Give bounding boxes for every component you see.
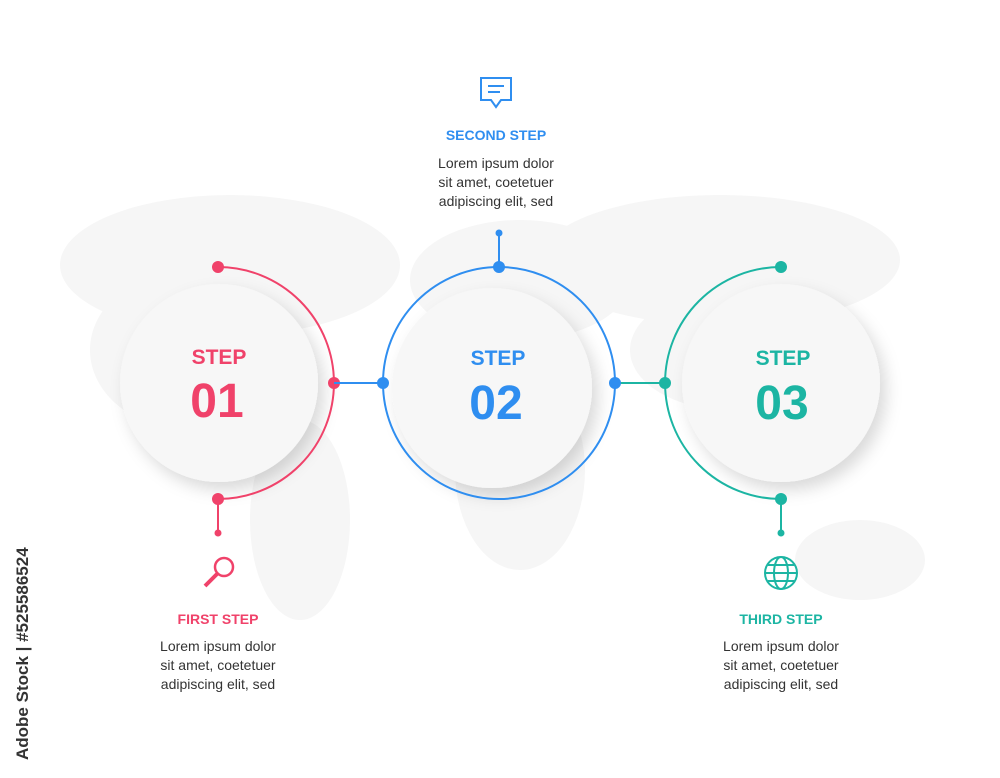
step 3 group: STEP xyxy=(756,347,810,370)
step 2 group xyxy=(377,230,621,499)
heading: second step: SECOND STEP xyxy=(446,127,546,143)
step 3 group xyxy=(659,261,880,536)
text: third step xyxy=(723,638,839,692)
text: third step: Lorem ipsum dolor xyxy=(723,638,839,654)
text: first step: sit amet, coetetuer xyxy=(160,657,276,673)
step 1 group: STEP xyxy=(192,346,246,369)
step 1 group xyxy=(120,261,340,536)
step 3 group: 03 xyxy=(755,377,809,430)
heading: first step: FIRST STEP xyxy=(178,611,258,627)
step 2 group: 02 xyxy=(469,377,523,430)
icon: magnifier xyxy=(205,558,233,586)
text: first step xyxy=(160,638,276,692)
step 1 group: 01 xyxy=(190,375,244,428)
text: first step: adipiscing elit, sed xyxy=(161,676,275,692)
icon: chat bubble xyxy=(481,78,511,107)
step 2 group: STEP xyxy=(471,347,525,370)
text: first step: Lorem ipsum dolor xyxy=(160,638,276,654)
text: second step: Lorem ipsum dolor xyxy=(438,155,554,171)
watermark: Adobe Stock | #525586524 xyxy=(13,547,32,760)
text: second step: adipiscing elit, sed xyxy=(439,193,553,209)
icon: globe xyxy=(765,557,797,589)
text: second step: sit amet, coetetuer xyxy=(438,174,554,190)
text: second step xyxy=(438,155,554,209)
connectors xyxy=(334,382,665,384)
text: third step: adipiscing elit, sed xyxy=(724,676,838,692)
text: third step: sit amet, coetetuer xyxy=(723,657,839,673)
heading: third step: THIRD STEP xyxy=(739,611,823,627)
